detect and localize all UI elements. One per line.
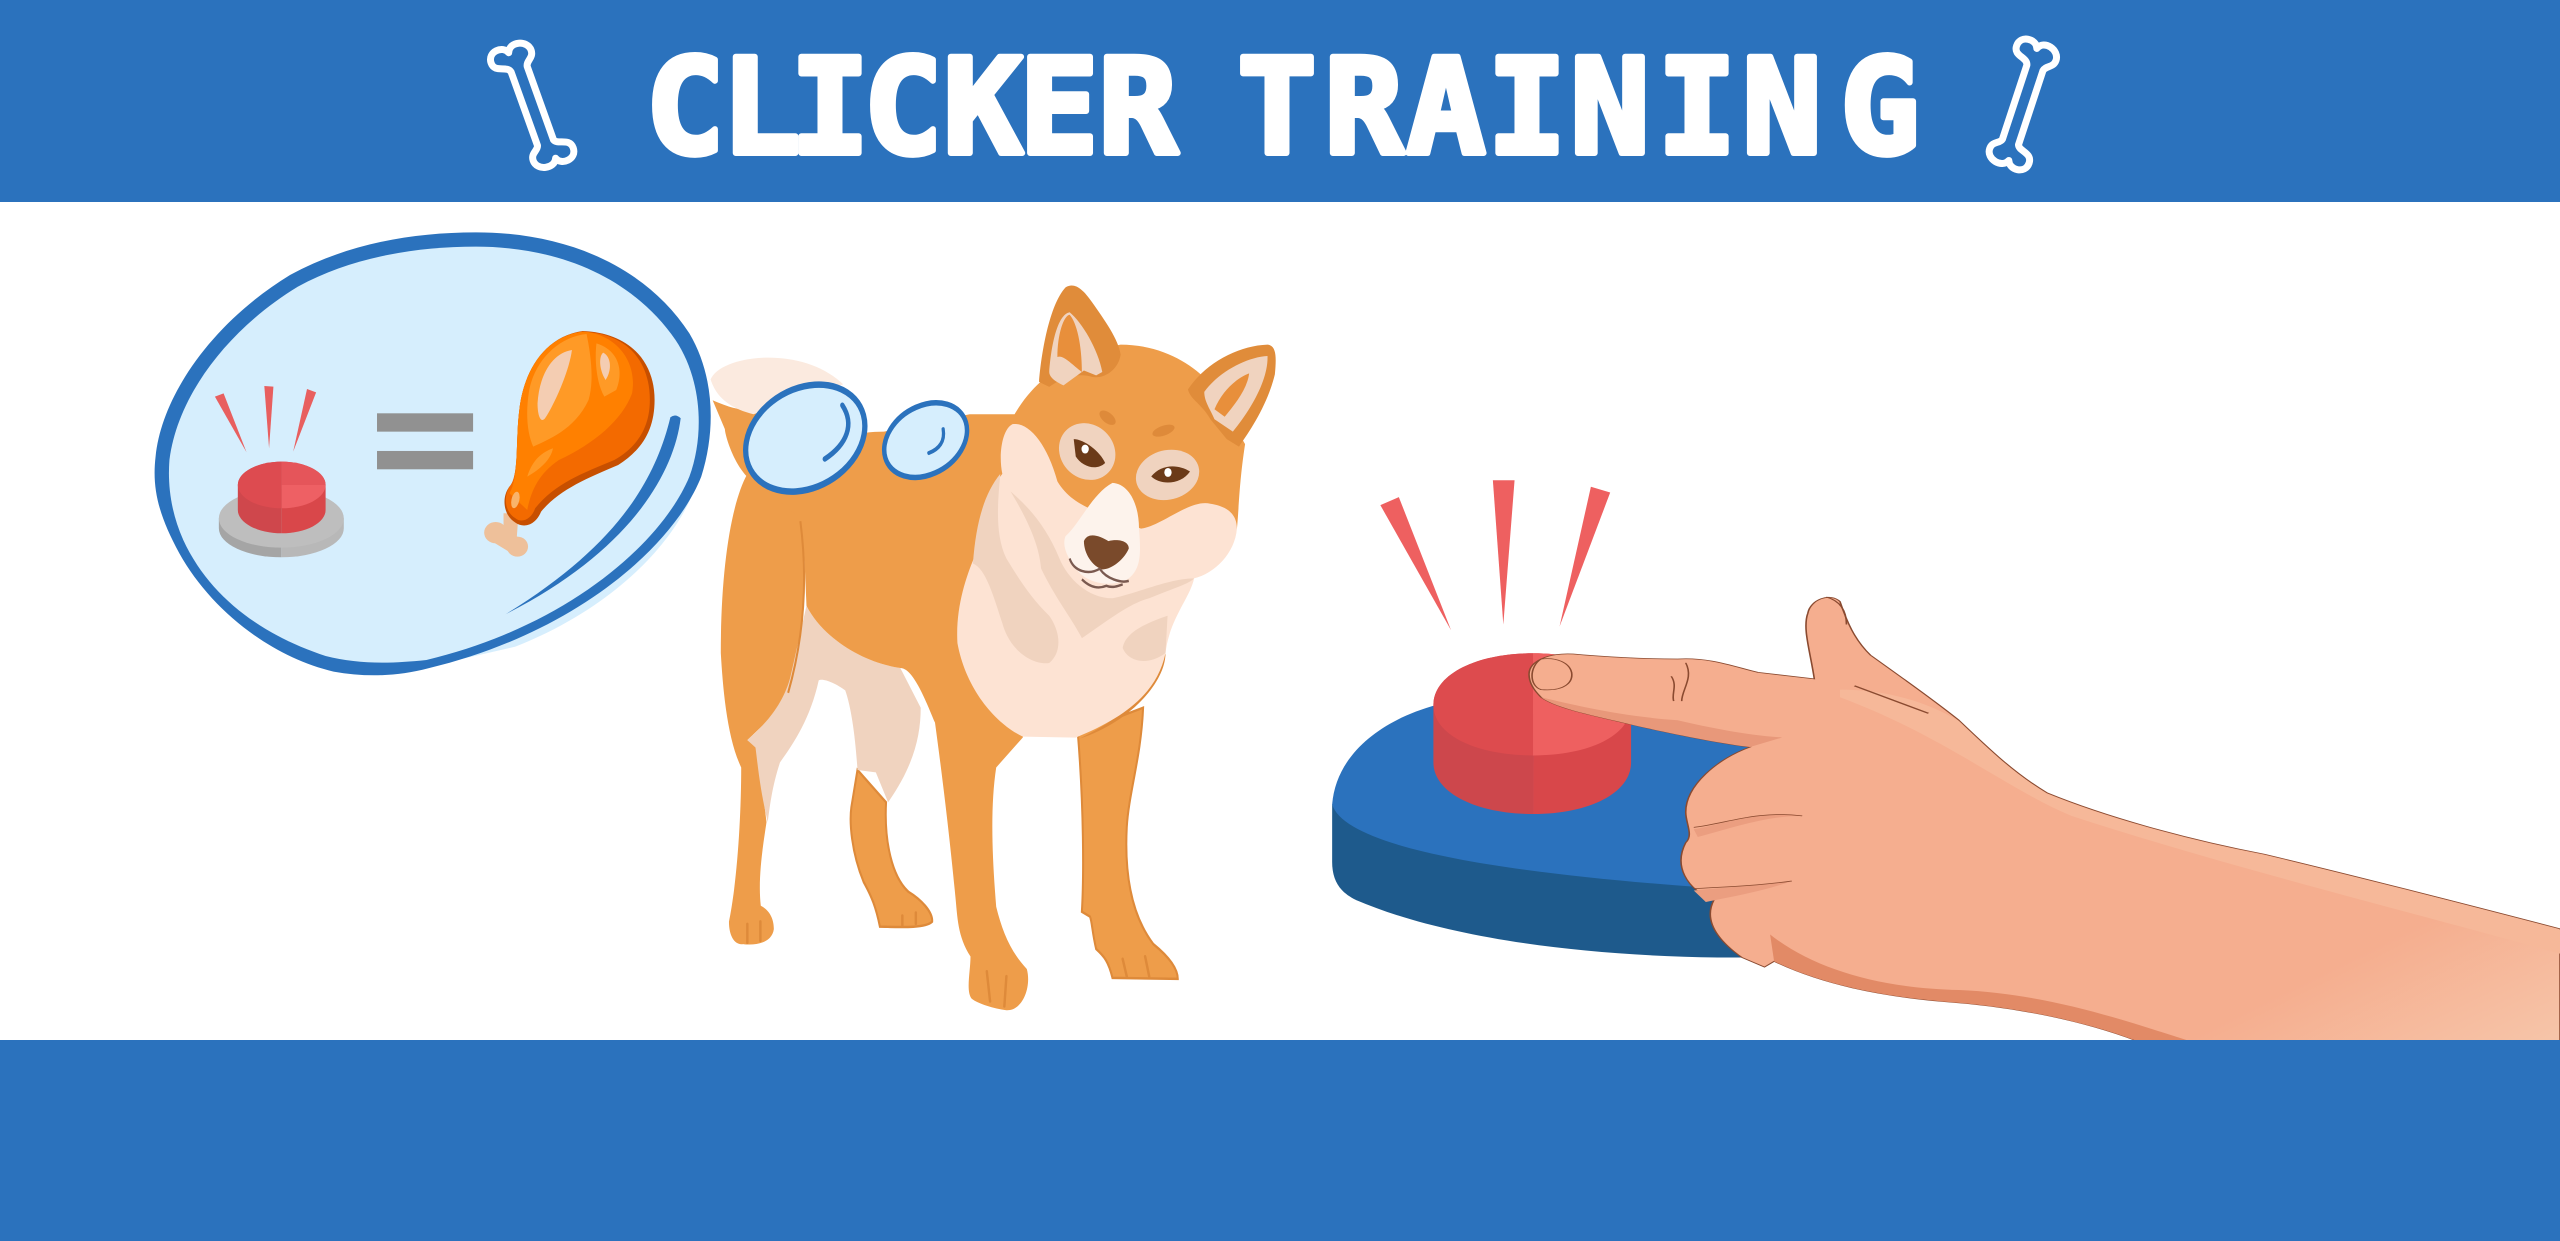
dog belly [747,606,921,822]
finger underside shading [1541,697,1782,747]
left ear [1039,285,1121,387]
knuckle shading [1694,815,1802,902]
panel: shiba inu dog [711,285,1276,1010]
hand crease lines [1532,597,1928,889]
fur shading [973,474,1194,663]
icon: chicken drumstick [484,331,655,557]
icon: small clicker button [215,386,344,557]
bubble outline [155,232,711,675]
equals sign [377,413,473,469]
click sparks [1380,480,1610,630]
dog muzzle [1064,483,1140,588]
hip contour [788,521,804,693]
hand [1529,597,2560,1041]
icon: right bone [1979,36,2067,173]
icon: left bone [488,37,576,174]
paw toe lines [747,913,1149,1006]
bottom banner [0,1040,2560,1241]
clicker red button [1433,653,1631,814]
small thought bubble near tail [734,367,876,509]
near hind leg [721,474,805,945]
chest and cheeks [957,424,1237,738]
chest outline shadow [1080,653,1166,739]
clicker base [1332,705,1782,958]
hand highlight [1840,690,2560,954]
dog eyes [1054,416,1202,505]
panel: thought bubble [155,232,711,675]
far front leg [1078,708,1178,979]
far hind leg [851,770,932,927]
dog head [1015,345,1245,539]
hand underside shading [1770,935,2188,1041]
dog tail [711,358,843,479]
inner highlight stroke [506,416,681,614]
bubble fill [169,247,699,663]
dog body [747,414,1088,1010]
right ear [1188,345,1276,447]
title: CLICKER TRAINING [645,31,1920,185]
dog brows [1098,407,1176,439]
bubble pale spill [428,433,703,667]
panel: hand pressing clicker [1332,480,2560,1041]
top banner [0,0,2560,202]
smallest thought bubble [876,390,976,491]
